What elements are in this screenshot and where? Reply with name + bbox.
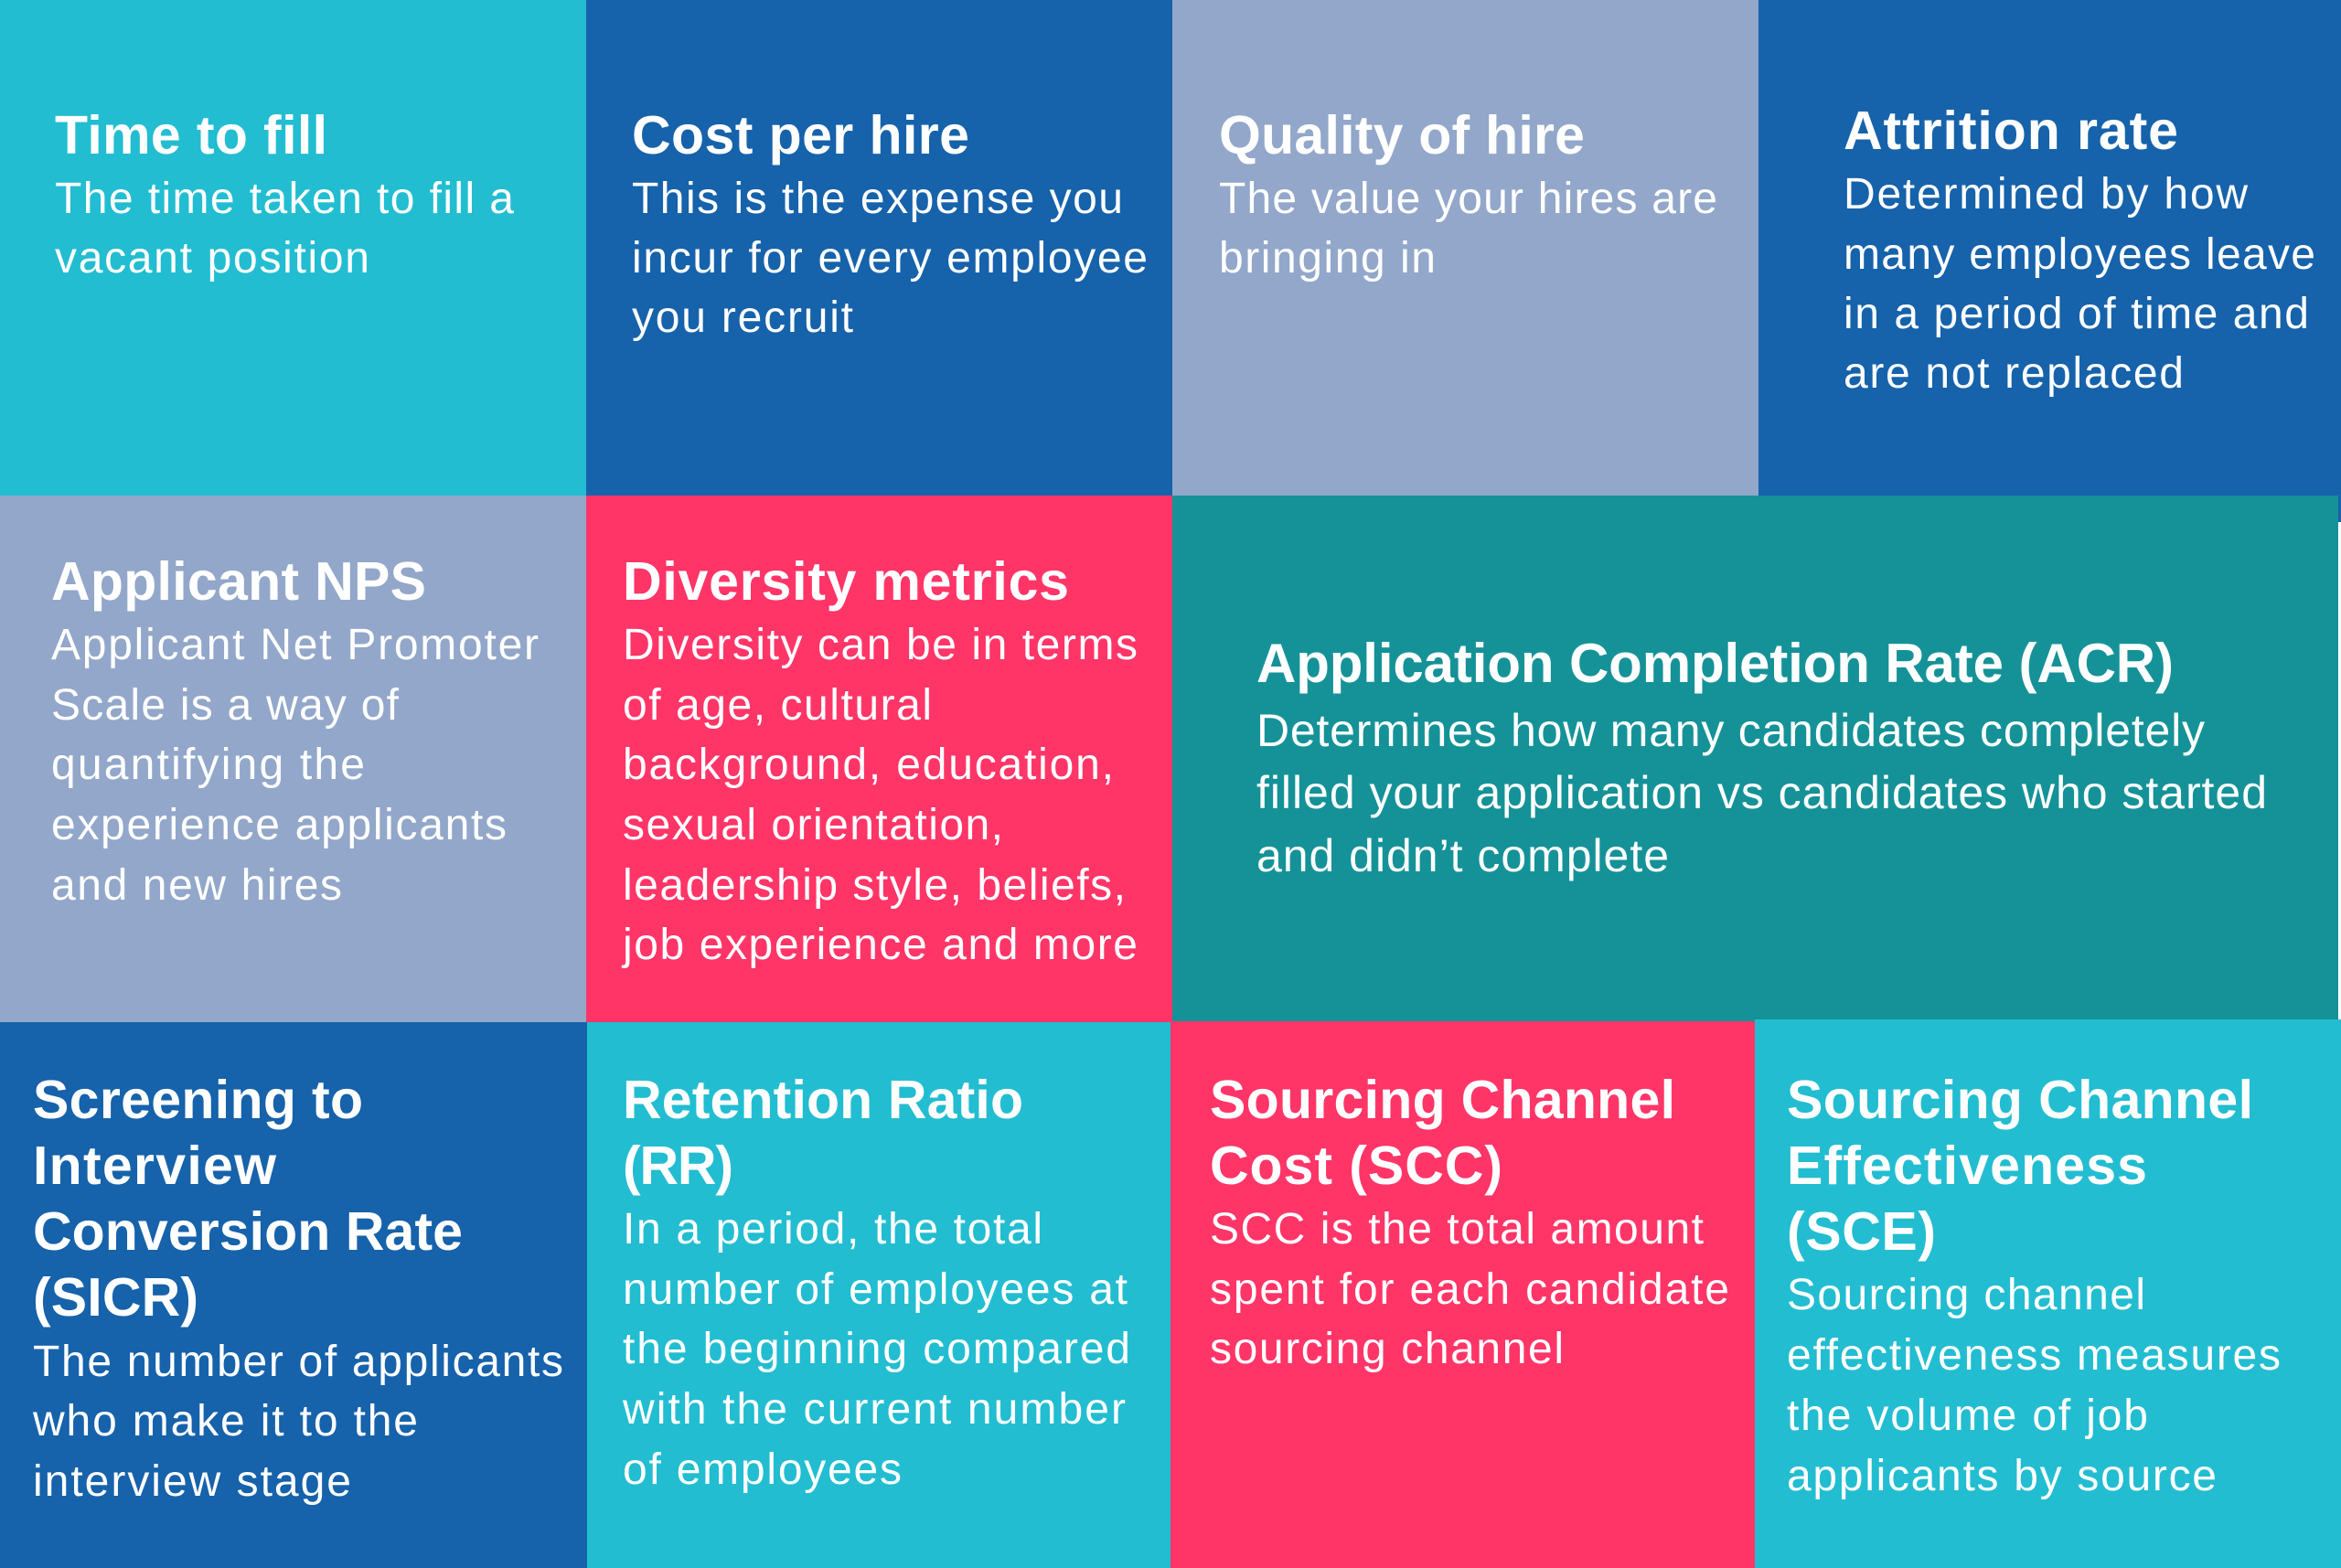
heading: Quality of hire: Quality of hire (1219, 105, 1585, 165)
text: Applicant NPS description: Applicant Net Promoter (51, 621, 539, 669)
panel: Time to fill (0, 0, 586, 496)
heading: Retention Ratio (RR): Retention Ratio (623, 1070, 1023, 1130)
heading: Sourcing Channel Cost (SCC): Sourcing Channel (1210, 1070, 1675, 1130)
text: SCE description: effectiveness measures (1787, 1331, 2281, 1380)
text: Attrition rate description: Determined by how (1844, 170, 2248, 219)
text: Retention Ratio description: number of employees at (623, 1265, 1128, 1314)
text: SCC description: SCC is the total amount (1210, 1205, 1704, 1253)
heading: Screening to Interview Conversion Rate (SICR): (SICR) (33, 1267, 198, 1328)
text: Applicant NPS description: and new hires (51, 861, 342, 910)
text: SCC description: sourcing channel (1210, 1325, 1564, 1373)
text: Quality of hire description: bringing in (1219, 234, 1436, 283)
text: Retention Ratio description: of employees (623, 1445, 902, 1494)
heading: Sourcing Channel Cost (SCC) (1210, 1070, 1675, 1196)
text: SICR description: interview stage (33, 1457, 351, 1506)
text: Applicant NPS description: experience applicants (51, 801, 507, 849)
text: Attrition rate description: many employees leave (1844, 230, 2315, 279)
text: Applicant NPS description: Scale is a way of (51, 681, 400, 730)
heading: Application Completion Rate (ACR): Application Completion Rate (ACR) (1256, 633, 2174, 694)
text: SICR description (32, 1338, 563, 1506)
panel: Sourcing Channel Cost (1170, 1021, 1755, 1568)
text: Attrition rate description (1844, 170, 2315, 398)
heading: Attrition rate: Attrition rate (1844, 101, 2178, 161)
panel: Quality of hire (1172, 0, 1758, 496)
text: Cost per hire description: incur for every employee (632, 234, 1148, 283)
text: SCC description: spent for each candidate (1210, 1265, 1729, 1314)
text: SCE description: the volume of job (1787, 1392, 2148, 1440)
text: ACR description: filled your application vs candidates who started (1256, 767, 2267, 818)
text: Diversity metrics description: job experience and more (621, 921, 1138, 969)
heading: Screening to Interview Conversion Rate (SICR): Interview (33, 1136, 276, 1196)
text: SCE description (1787, 1271, 2281, 1500)
panel: Sourcing Channel Effectiveness (1755, 1019, 2341, 1568)
text: Diversity metrics description: Diversity can be in terms (623, 621, 1138, 669)
heading: Screening to Interview Conversion Rate (SICR): Conversion Rate (33, 1201, 463, 1262)
panel: Screening to Interview Conversion Rate (0, 1022, 587, 1568)
heading: Retention Ratio (RR): (RR) (623, 1136, 733, 1196)
panel: Attrition rate (1758, 0, 2341, 496)
text: Retention Ratio description (622, 1205, 1130, 1494)
text: Quality of hire description (1219, 175, 1717, 283)
panel: Application Completion Rate (1172, 496, 2338, 1022)
text: Attrition rate description: are not replaced (1844, 349, 2184, 398)
text: SCC description (1210, 1205, 1729, 1373)
heading: Screening to Interview Conversion Rate (SICR) (33, 1070, 463, 1328)
heading: Sourcing Channel Cost (SCC): Cost (SCC) (1210, 1136, 1502, 1196)
heading: Applicant NPS: Applicant NPS (51, 551, 426, 612)
heading: Sourcing Channel Effectiveness (SCE): (SCE) (1787, 1201, 1936, 1262)
text: Time to fill description: The time taken to fill a (55, 175, 514, 223)
text: SCE description: applicants by source (1787, 1452, 2217, 1500)
text: Applicant NPS description (51, 621, 539, 910)
text: SCE description: Sourcing channel (1787, 1271, 2145, 1319)
text: Attrition rate description: in a period of time and (1844, 290, 2309, 338)
text: Retention Ratio description: In a period, the total (623, 1205, 1042, 1253)
panel: Retention Ratio (587, 1022, 1170, 1568)
heading: Retention Ratio (RR) (623, 1070, 1023, 1196)
text: Applicant NPS description: quantifying the (51, 741, 365, 789)
panel: Cost per hire (586, 0, 1172, 496)
text: Cost per hire description: you recruit (632, 293, 853, 342)
text: Time to fill description (55, 175, 514, 283)
panel: Diversity metrics (586, 496, 1172, 1022)
text: SICR description: who make it to the (32, 1397, 418, 1445)
text: Diversity metrics description: of age, cultural (623, 681, 932, 730)
text: Retention Ratio description: the beginning compared (623, 1325, 1130, 1373)
text: Diversity metrics description: sexual orientation, (623, 801, 1003, 849)
text: Time to fill description: vacant position (55, 234, 369, 283)
text: ACR description (1256, 705, 2267, 881)
heading: Sourcing Channel Effectiveness (SCE) (1787, 1070, 2253, 1262)
text: SICR description: The number of applicants (33, 1338, 563, 1386)
text: Diversity metrics description: leadership style, beliefs, (623, 861, 1126, 910)
text: Quality of hire description: The value your hires are (1219, 175, 1717, 223)
heading: Time to fill: Time to fill (55, 105, 327, 165)
heading: Screening to Interview Conversion Rate (SICR): Screening to (33, 1070, 363, 1130)
text: Diversity metrics description (621, 621, 1138, 969)
text: ACR description: and didn’t complete (1256, 830, 1669, 881)
panel: Applicant NPS (0, 496, 586, 1022)
heading: Cost per hire: Cost per hire (632, 105, 969, 165)
text: Cost per hire description: This is the expense you (632, 175, 1123, 223)
text: Cost per hire description (632, 175, 1148, 342)
heading: Diversity metrics: Diversity metrics (623, 551, 1069, 612)
heading: Sourcing Channel Effectiveness (SCE): Sourcing Channel (1787, 1070, 2253, 1130)
heading: Sourcing Channel Effectiveness (SCE): Effectiveness (1787, 1136, 2147, 1196)
text: ACR description: Determines how many candidates completely (1256, 705, 2205, 756)
text: Retention Ratio description: with the current number (622, 1385, 1126, 1434)
text: Diversity metrics description: background, education, (623, 741, 1114, 789)
